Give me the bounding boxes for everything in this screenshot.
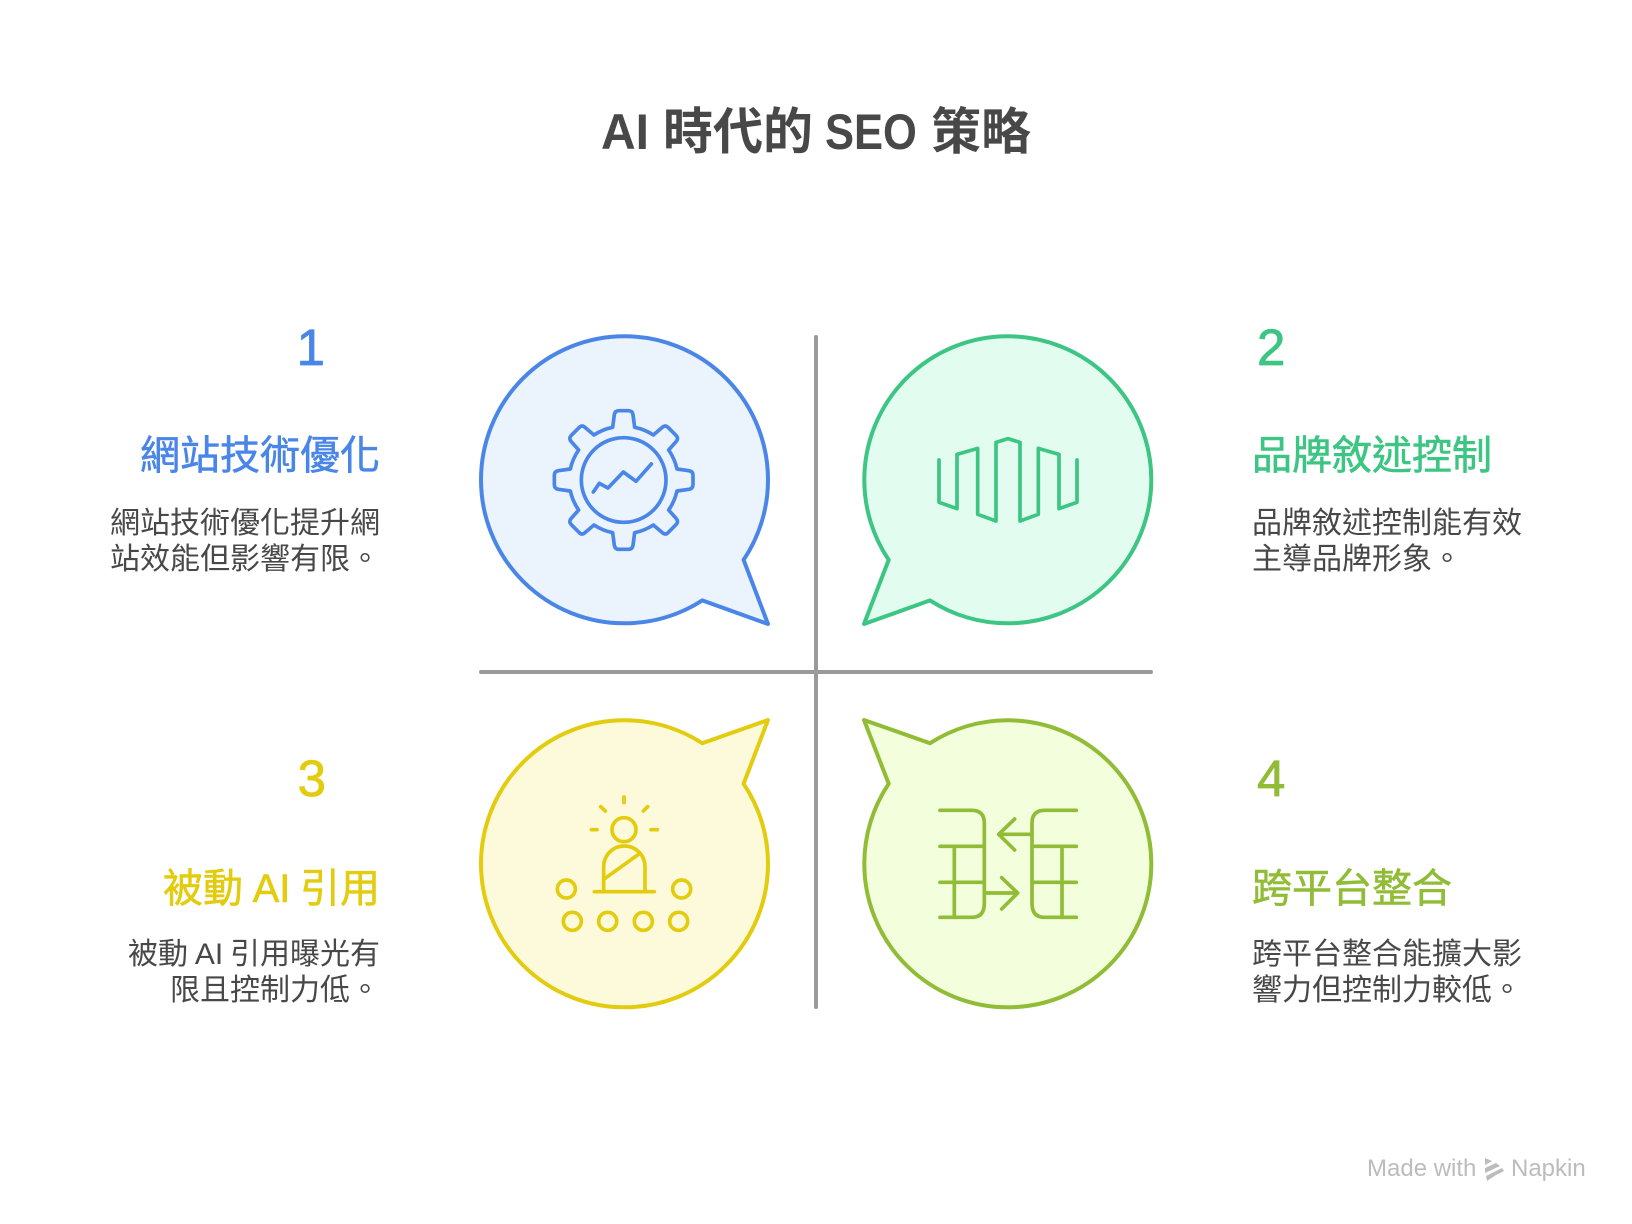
number 4: 4	[1257, 750, 1285, 807]
body 3: 被動 AI 引用曝光有	[128, 938, 380, 971]
heading 1: 網站技術優化	[140, 434, 380, 478]
body 2: 品牌敘述控制能有效	[1252, 507, 1522, 540]
number 1: 1	[297, 319, 325, 376]
body 2	[1252, 507, 1522, 576]
body 4: 跨平台整合能擴大影	[1252, 938, 1522, 971]
body 3	[128, 938, 380, 1007]
title: AI	[601, 104, 649, 160]
body 1: 站效能但影響有限。	[110, 543, 380, 576]
body 2: 主導品牌形象。	[1252, 543, 1462, 576]
heading 4: 跨平台整合	[1252, 867, 1452, 911]
body 4	[1252, 938, 1522, 1007]
speech bubble 4: olive	[864, 720, 1151, 1007]
horizontal axis	[481, 670, 1151, 674]
title: 策略	[931, 104, 1031, 160]
body 1	[110, 507, 380, 576]
icon: gear with chart	[554, 411, 693, 549]
heading 2: 品牌敘述控制	[1252, 434, 1492, 478]
speech bubble 3: yellow	[481, 720, 768, 1007]
number 3: 3	[298, 750, 326, 807]
icon: two exchanging tables	[940, 810, 1076, 917]
watermark: made with: Made with	[1367, 1155, 1476, 1182]
icon: napkin logo	[1485, 1158, 1504, 1181]
icon: zigzag waveform	[939, 439, 1077, 521]
body 1: 網站技術優化提升網	[110, 507, 380, 540]
title	[601, 104, 1031, 160]
watermark: napkin: Napkin	[1511, 1155, 1586, 1182]
vertical axis	[814, 337, 818, 1007]
speech bubble 2: green	[864, 336, 1151, 624]
title: 時代的	[663, 104, 813, 160]
speech bubble 1: blue	[481, 336, 768, 624]
heading 3: 被動 AI 引用	[163, 867, 380, 911]
panel: 2 品牌敘述控制	[1252, 319, 1522, 576]
number 2: 2	[1257, 319, 1285, 376]
panel: 4 跨平台整合	[1252, 750, 1522, 1007]
body 3: 限且控制力低。	[170, 974, 380, 1007]
panel: 1 網站技術優化	[110, 319, 380, 576]
body 4: 響力但控制力較低。	[1252, 974, 1522, 1007]
icon: person with audience	[557, 797, 691, 930]
title: SEO	[825, 104, 917, 160]
panel: 3 被動 AI 引用	[128, 750, 380, 1007]
